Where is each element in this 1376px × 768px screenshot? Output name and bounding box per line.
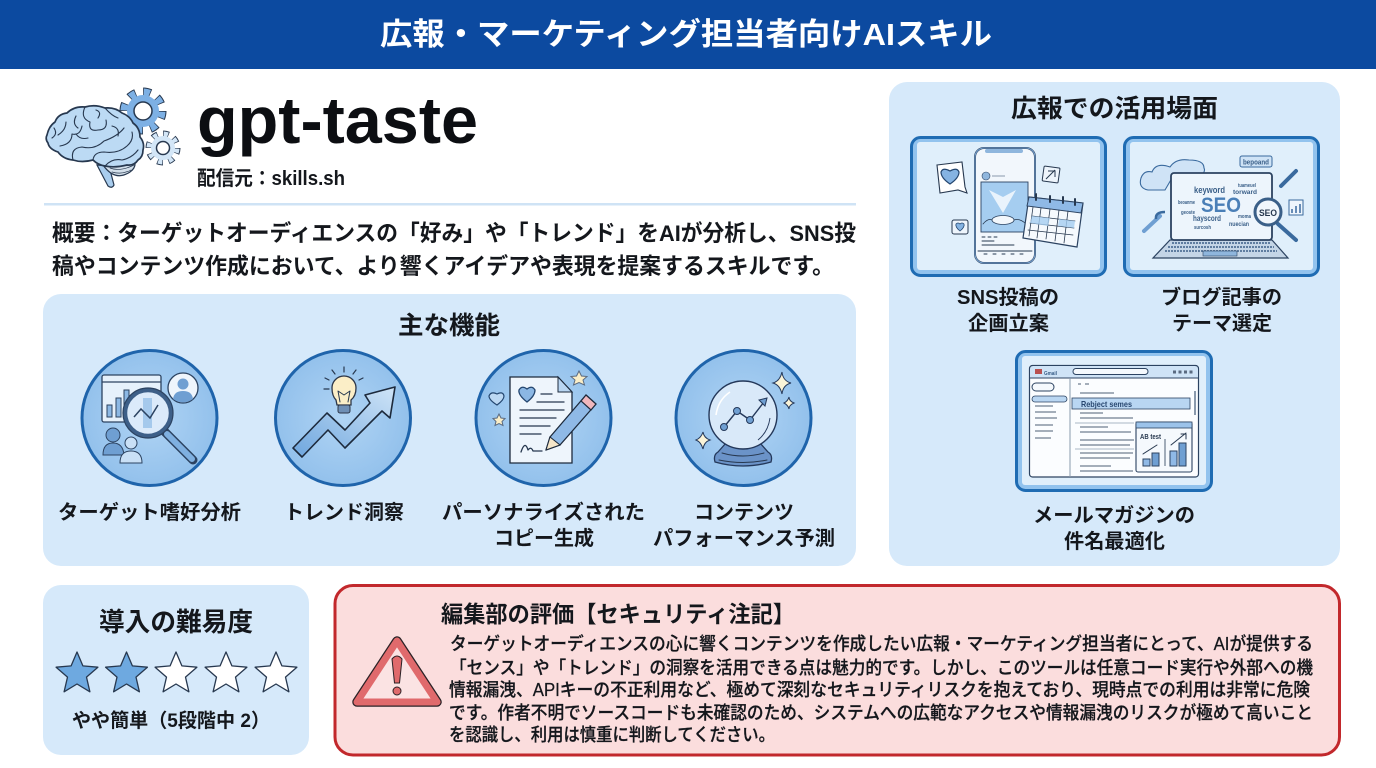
illustration: blog SEO: beoanme: [1178, 200, 1195, 206]
label: blog themes: テーマ選定: [1172, 312, 1272, 335]
difficulty label: やや簡単（5段階中 2）: [72, 709, 270, 732]
icon: target analysis: [82, 350, 217, 486]
heading: editorial review: 編集部の評価【セキュリティ注記】: [441, 601, 795, 627]
illustration: email subject A/B test: Rebject semes: [1081, 399, 1132, 409]
illustration: blog SEO: moma: [1238, 214, 1251, 220]
product name: gpt-taste: [197, 83, 478, 157]
icon: trend insight: [276, 350, 410, 486]
illustration: email subject A/B test: Gmail: [1044, 371, 1057, 377]
panel: main features: [43, 294, 856, 566]
illustration: blog SEO: keyword: [1194, 185, 1225, 196]
panel: PR use cases: [889, 82, 1340, 566]
review body text: を認識し、利用は慎重に判断してください。: [449, 725, 775, 745]
illustration: blog SEO: nuecian: [1229, 221, 1249, 228]
label: SNS planning: SNS投稿の: [957, 286, 1059, 309]
illustration: blog SEO: [1124, 138, 1318, 276]
illustration: blog SEO: torward: [1233, 190, 1257, 196]
label: SNS planning: [957, 286, 1059, 335]
icon: personalized copy: [476, 350, 611, 486]
title banner: 広報・マーケティング担当者向けAIスキル: [380, 17, 992, 52]
rating: 2 of 5 stars: [56, 652, 297, 692]
illustration: SNS planning: [912, 138, 1106, 276]
distributor: 配信元：skills.sh: [197, 167, 345, 190]
label: email subject optimization: 件名最適化: [1064, 530, 1165, 553]
illustration: blog SEO: geoste: [1181, 210, 1195, 216]
icon: warning triangle: [357, 641, 437, 702]
heading: difficulty: 導入の難易度: [99, 607, 253, 637]
icon: brain with gears: [46, 92, 177, 187]
panel: difficulty: [43, 585, 309, 755]
illustration: email subject A/B test: AB test: [1140, 434, 1162, 441]
review body text: です。作者不明でソースコードも未確認のため、システムへの広範なアクセスや情報漏洩のリスクが極めて高いこと: [449, 702, 1313, 723]
label: performance forecast: パフォーマンス予測: [653, 527, 835, 550]
label: personalized copy: コピー生成: [494, 526, 594, 550]
label: blog themes: ブログ記事の: [1161, 285, 1282, 309]
label: trend insight: トレンド洞察: [284, 501, 404, 524]
panel: editorial review: [335, 586, 1340, 755]
label: personalized copy: パーソナライズされた: [442, 500, 645, 524]
illustration: email subject A/B test: [1016, 352, 1212, 490]
label: personalized copy: [442, 500, 645, 550]
overview text: [52, 220, 856, 279]
label: target analysis: ターゲット嗜好分析: [58, 501, 241, 524]
label: blog themes: [1161, 285, 1282, 335]
label: SNS planning: 企画立案: [968, 312, 1049, 335]
review body text: 情報漏洩、APIキーの不正利用など、極めて深刻なセキュリティリスクを抱えており、現時点での利用は非常に危険: [449, 680, 1310, 700]
label: performance forecast: [653, 502, 835, 550]
review body text: ターゲットオーディエンスの心に響くコンテンツを作成したい広報・マーケティング担当者にとって、AIが提供する: [450, 633, 1313, 654]
illustration: blog SEO: tuameuel: [1238, 183, 1256, 189]
illustration: blog SEO: surcosh: [1194, 225, 1212, 231]
illustration: blog SEO: SEO: [1201, 194, 1241, 217]
overview text: 稿やコンテンツ作成において、より響くアイデアや表現を提案するスキルです。: [52, 253, 834, 279]
illustration: blog SEO: hayscord: [1193, 214, 1221, 223]
overview text: 概要：ターゲットオーディエンスの「好み」や「トレンド」をAIが分析し、SNS投: [52, 220, 856, 246]
heading: main features: 主な機能: [398, 312, 500, 340]
illustration: blog SEO: SEO: [1259, 208, 1277, 218]
review body text: 「センス」や「トレンド」の洞察を活用できる点は魅力的です。しかし、このツールは任意コード実行や外部への機: [450, 658, 1313, 678]
heading: use cases: 広報での活用場面: [1011, 95, 1218, 123]
review body text: [449, 633, 1313, 745]
label: email subject optimization: [1033, 504, 1195, 553]
divider: [44, 203, 856, 206]
title banner: [0, 0, 1376, 69]
label: performance forecast: コンテンツ: [694, 502, 794, 524]
label: email subject optimization: メールマガジンの: [1033, 504, 1195, 527]
icon: performance forecast: [676, 350, 811, 486]
illustration: blog SEO: bepoand: [1243, 160, 1269, 166]
